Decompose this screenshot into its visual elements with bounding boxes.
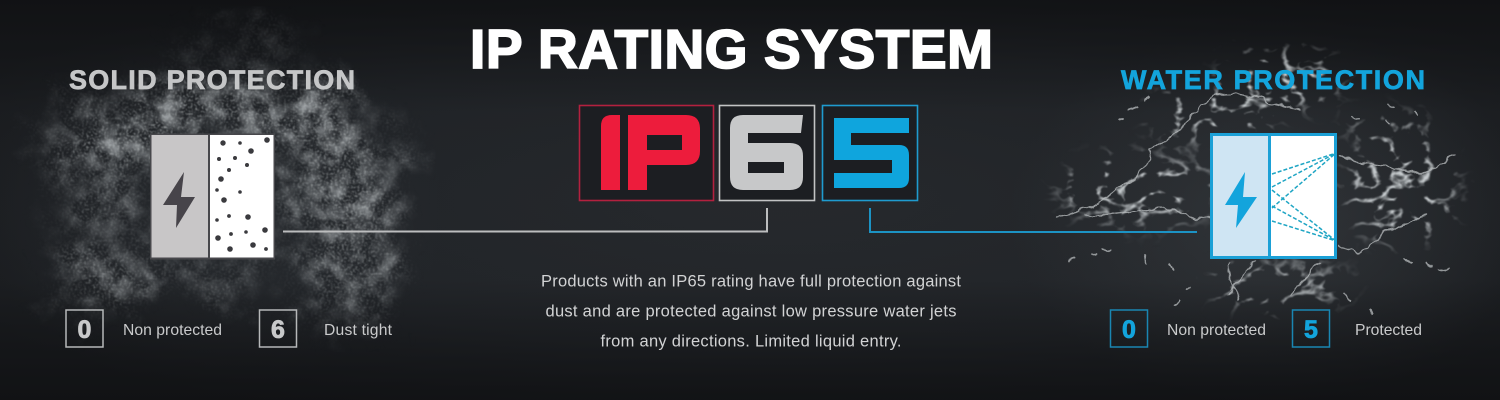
legend: solid 6	[260, 310, 296, 347]
legend text: dust tight: Dust tight	[324, 322, 393, 339]
legend: water 5: 5	[1304, 316, 1318, 344]
water splash strokes	[1056, 94, 1455, 316]
legend text: protected: Protected	[1355, 322, 1422, 339]
badge: IP	[580, 106, 714, 200]
description text	[541, 272, 961, 350]
dust particles	[215, 137, 270, 252]
title: IP RATING SYSTEM	[470, 18, 993, 80]
icon: water enclosure	[1210, 133, 1337, 259]
heading: solid protection: SOLID PROTECTION	[69, 65, 355, 95]
legend: water 5	[1292, 310, 1330, 347]
description text: from any directions. Limited liquid entry.	[600, 332, 902, 350]
water jets	[1272, 153, 1336, 241]
connector: solid	[283, 208, 767, 232]
icon: lightning bolt	[1225, 172, 1257, 228]
legend text: non protected: Non protected	[1167, 322, 1266, 339]
badge: 5	[822, 106, 918, 200]
description text: Products with an IP65 rating have full protection against	[541, 272, 961, 290]
legend: water 0: 0	[1122, 316, 1136, 344]
legend: water 0	[1110, 310, 1148, 347]
dust cloud mottled layer	[45, 35, 400, 323]
icon: lightning bolt	[163, 172, 195, 228]
connector: water	[870, 208, 1197, 232]
description text: dust and are protected against low pressure water jets	[546, 302, 956, 320]
legend: solid 6: 6	[271, 316, 285, 344]
legend text: non protected: Non protected	[123, 322, 222, 339]
legend: solid 0	[66, 310, 103, 347]
legend: solid 0: 0	[78, 316, 91, 344]
heading: water protection: WATER PROTECTION	[1121, 65, 1425, 95]
icon: solid enclosure	[150, 134, 275, 260]
badge: 6	[720, 106, 814, 200]
dust cloud grain layer	[45, 35, 400, 323]
water splash vein texture	[1060, 52, 1455, 307]
